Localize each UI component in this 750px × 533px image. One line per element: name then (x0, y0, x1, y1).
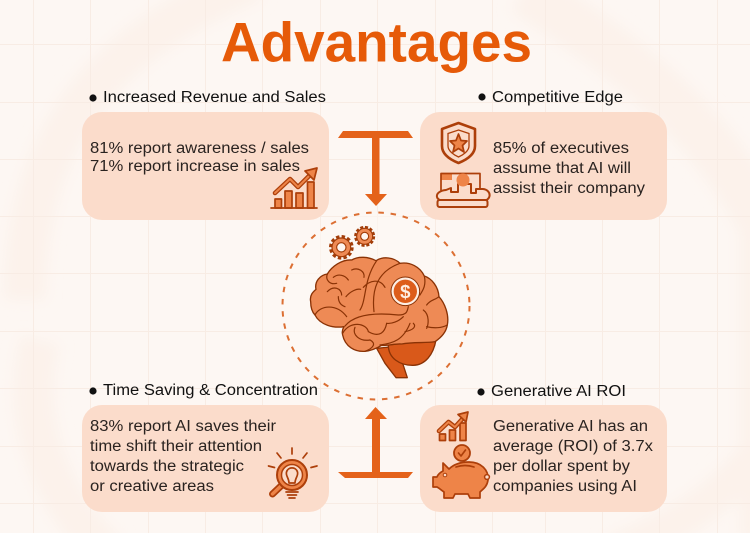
icon: magnifier with light bulb (268, 448, 317, 498)
text: competitive edge stat: assist their company (493, 180, 645, 197)
card: generative AI ROI (420, 405, 667, 512)
text: time saving stat: towards the strategic (90, 458, 244, 475)
heading: time saving and concentration: Time Saving & Concentration (103, 382, 318, 399)
text: revenue stats: 81% report awareness / sales (90, 140, 309, 157)
card: competitive edge (420, 112, 667, 220)
text: time saving stat: or creative areas (90, 478, 214, 495)
icon: gears (331, 227, 374, 258)
icon: money stack (437, 173, 490, 207)
text: ROI stat: per dollar spent by (493, 458, 630, 475)
icon: mini growth chart (439, 412, 468, 440)
text: time saving stat: time shift their attention (90, 438, 262, 455)
icon: brain with gears and dollar coin (310, 227, 448, 378)
text: revenue stats (90, 140, 309, 175)
text: ROI stat: average (ROI) of 3.7x (493, 438, 653, 455)
icon: growth chart (271, 168, 317, 208)
text: competitive edge stat: assume that AI will (493, 160, 631, 177)
text: ROI stat: Generative AI has an (493, 418, 648, 435)
panel: increased revenue and sales (82, 89, 329, 220)
heading: competitive edge: Competitive Edge (492, 89, 623, 106)
card: time saving (82, 405, 329, 512)
heading: increased revenue and sales: Increased Revenue and Sales (103, 89, 326, 106)
text: competitive edge stat (493, 140, 645, 197)
card: revenue (82, 112, 329, 220)
icon: dollar coin (391, 277, 420, 306)
icon: shield with star (442, 123, 475, 163)
panel: generative AI ROI (420, 383, 667, 512)
arrow: top T arrow pointing down (338, 131, 413, 206)
heading: generative AI ROI: Generative AI ROI (491, 383, 626, 400)
panel: competitive edge (420, 89, 667, 220)
icon: piggy bank with coin (433, 445, 489, 498)
arrow: bottom T arrow pointing up (338, 407, 413, 478)
text: time saving stat (90, 418, 276, 495)
panel: time saving and concentration (82, 382, 329, 512)
icon: dollar coin: $ (400, 281, 411, 302)
text: ROI stat: companies using AI (493, 478, 637, 495)
text: competitive edge stat: 85% of executives (493, 140, 629, 157)
text: revenue stats: 71% report increase in sales (90, 158, 300, 175)
dashed circle (282, 212, 470, 400)
brain stem and cerebellum (377, 340, 436, 378)
title: Advantages (221, 10, 532, 74)
text: ROI stat (493, 418, 653, 495)
brain hemisphere (310, 257, 448, 351)
text: time saving stat: 83% report AI saves their (90, 418, 276, 435)
brain folds (315, 261, 447, 351)
